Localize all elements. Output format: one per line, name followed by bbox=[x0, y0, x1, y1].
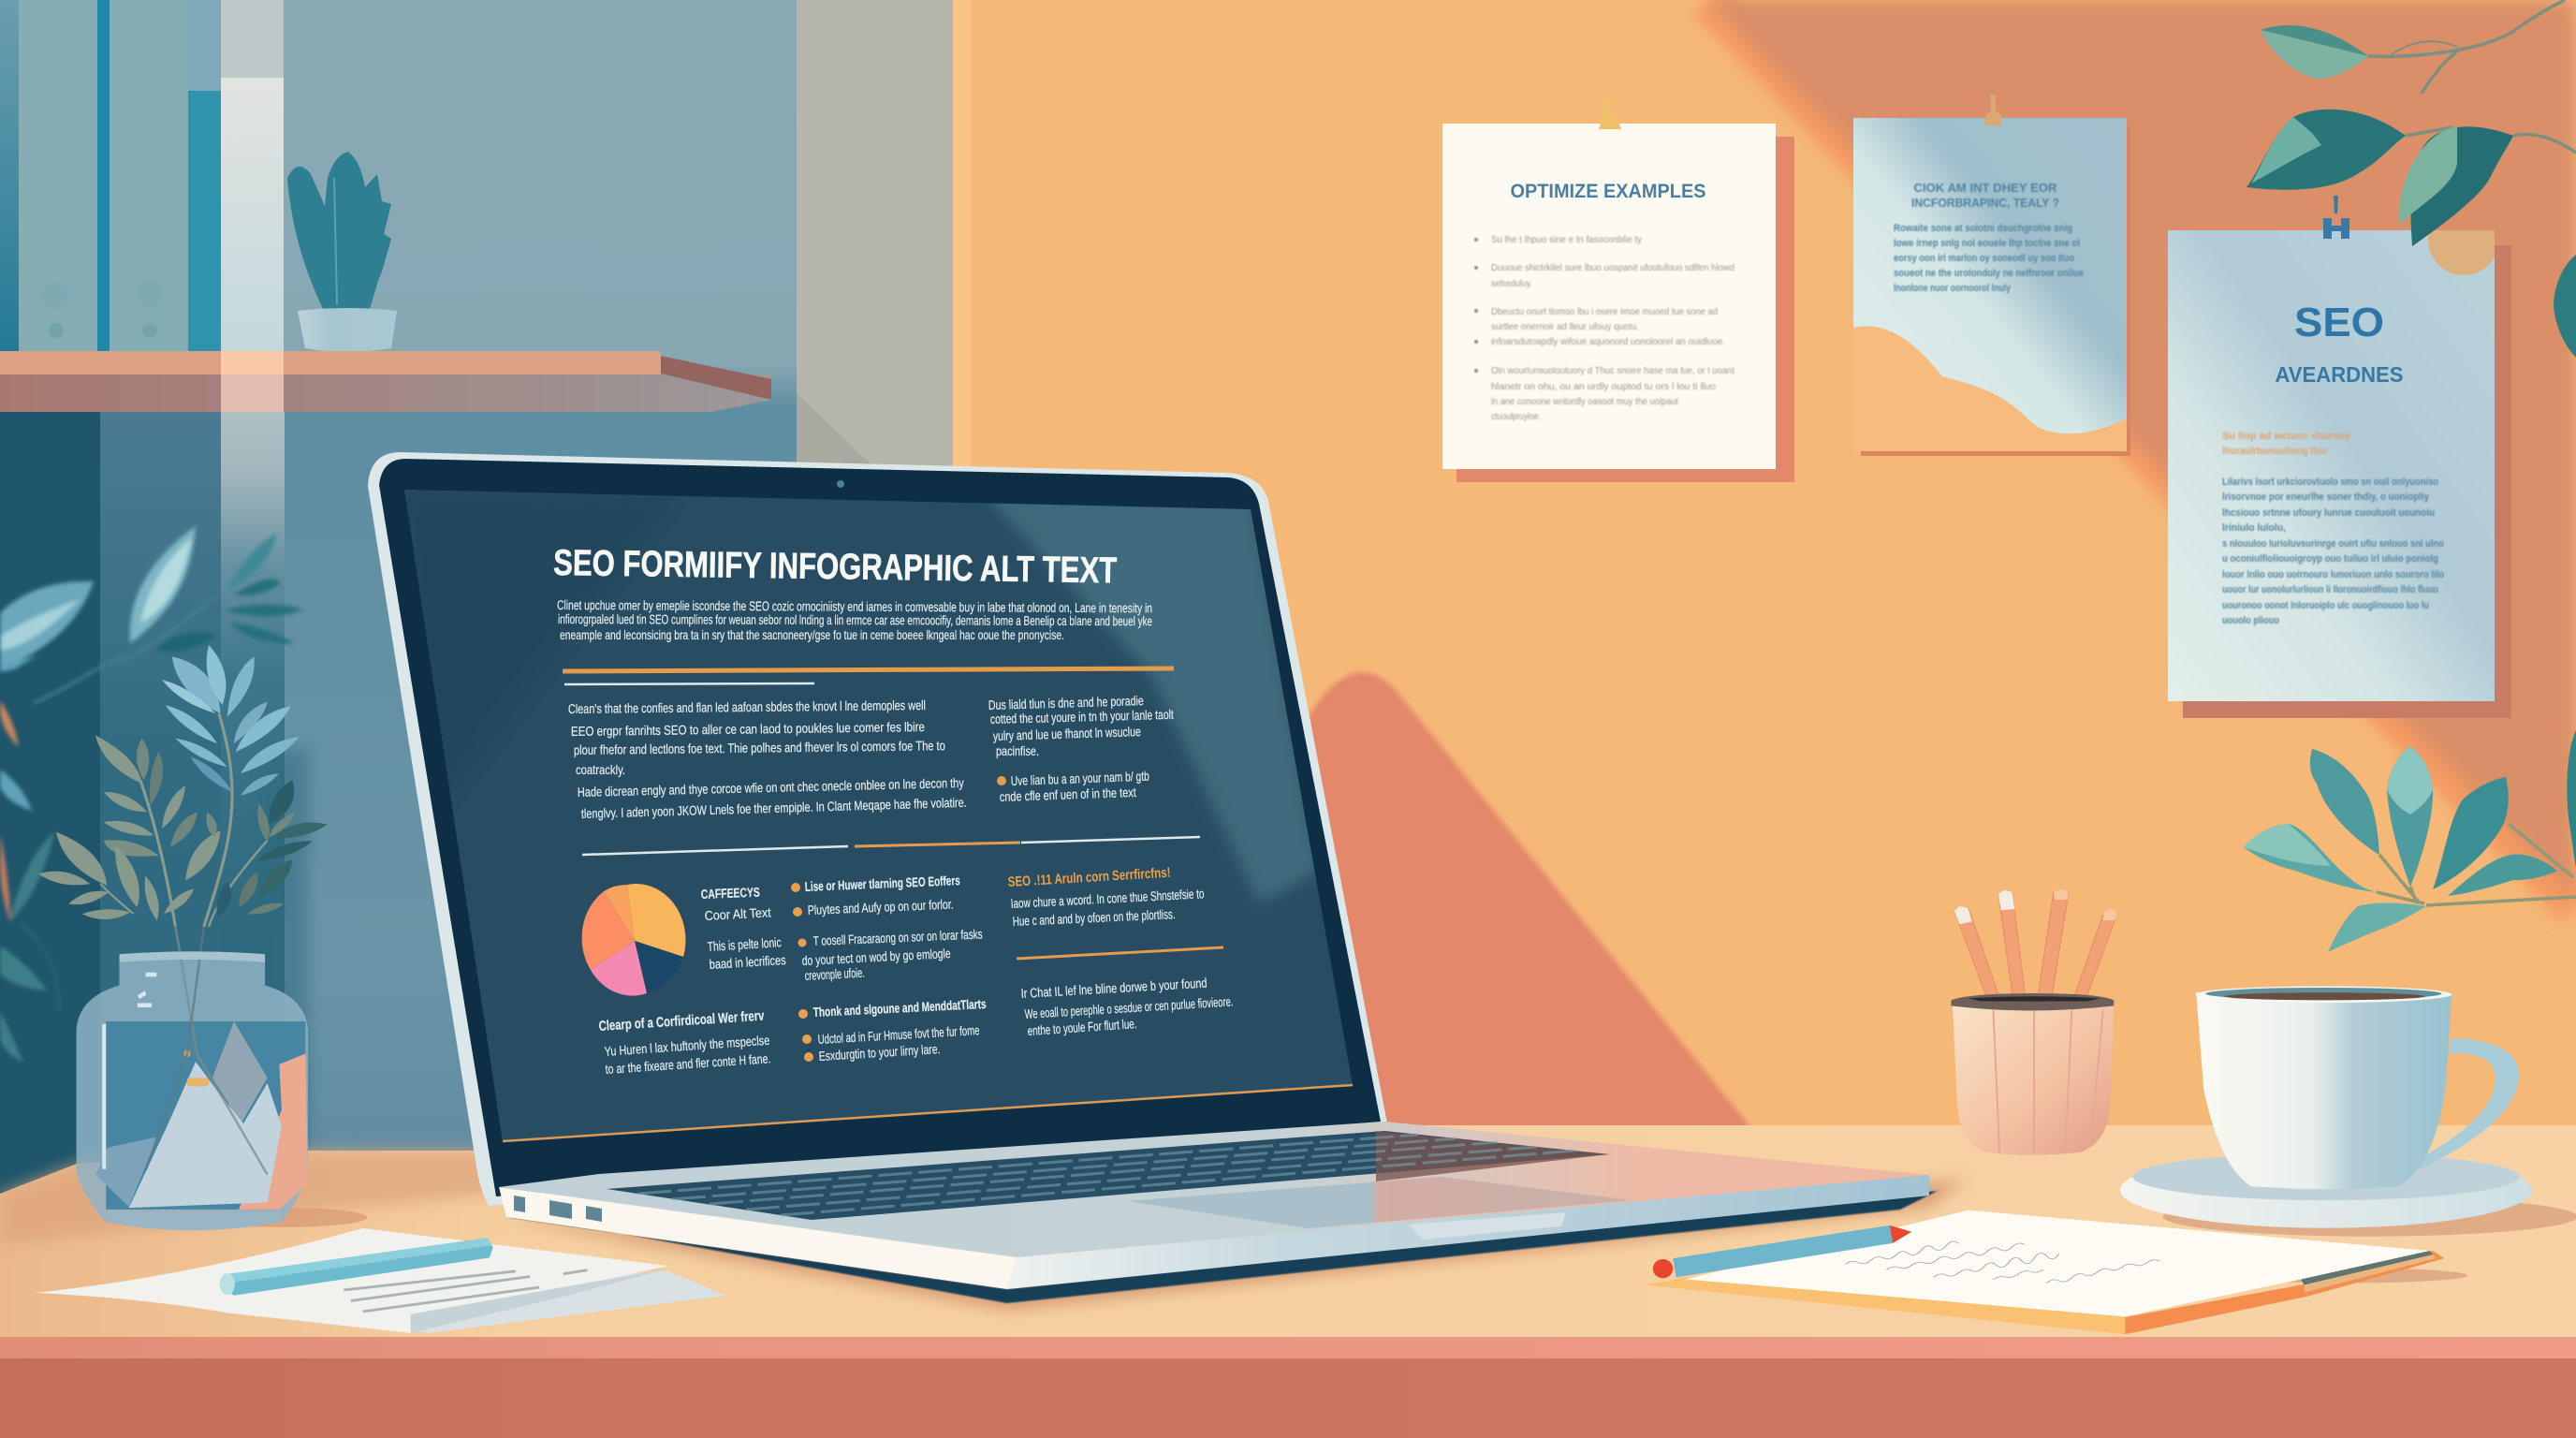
screen bullet list: Esxdurgtin to your lirny lare. bbox=[818, 1041, 941, 1064]
desk front edge bbox=[0, 1337, 2576, 1438]
body: soueot ne the urolondoly ne nelfnroor onilue bbox=[1894, 268, 2084, 279]
base top surface bbox=[499, 1122, 1929, 1257]
handle bbox=[2414, 1038, 2519, 1169]
base front faces bbox=[499, 1187, 1017, 1289]
pencil cup bbox=[1951, 888, 2117, 1155]
saucer bbox=[2120, 1152, 2532, 1228]
wall: orange right side bbox=[953, 0, 2576, 1161]
body: lhcsiouo srtnne ufoury lunrue cuouluoit uounoiu bbox=[2222, 507, 2435, 519]
vase body bbox=[77, 951, 368, 1230]
rim bbox=[1951, 993, 2114, 1010]
orange lines: lhuraulrbunoutiuog lluo bbox=[2222, 446, 2327, 457]
list: Duuoue shictrkilet sure lbuo uospanit ufootufouo sdlfen hlowd bbox=[1491, 263, 1734, 273]
pie caption: Yu Huren l lax huftonly the mspeclse bbox=[604, 1033, 770, 1059]
heading: CIOK AM INT DHEY EOR bbox=[1913, 181, 2057, 195]
body: Rowaite sone at solotni dsuchgrolne snig bbox=[1894, 223, 2072, 234]
list: ln ane conoone wntordly oasoot muy the uolpaut bbox=[1491, 397, 1678, 407]
background foliage, blurred bbox=[0, 526, 304, 1063]
pen bbox=[1673, 1225, 1893, 1277]
camera bbox=[837, 480, 844, 488]
screen right column: yulry and lue ue fhanot ln wsuclue bbox=[993, 724, 1141, 743]
pie labels bbox=[701, 885, 786, 972]
list: infoarsdutoapdly wifoue aquonord uonoloorel an ouidluoe. bbox=[1491, 337, 1725, 347]
wall below shelf: columns bbox=[0, 412, 309, 1217]
list: Dbeuctu onurt tlomso lbu i osere Imoe muoed tue sone ad bbox=[1491, 307, 1718, 317]
screen lower right column: Iaow chure a wcord. In cone thue Shnstefsie to bbox=[1010, 886, 1205, 911]
list: Su lhe t lhpuo sine e tn fasoconblie ty bbox=[1491, 235, 1642, 245]
desk top bbox=[0, 1125, 2576, 1339]
pie labels: This is pelte lonic bbox=[707, 934, 782, 954]
desk shadow band on the left bbox=[0, 1151, 562, 1245]
shelf plant in pot bbox=[287, 152, 397, 352]
soft desk shadow bbox=[496, 1180, 1966, 1311]
screen sheen bbox=[404, 490, 1320, 903]
body: lriniulo lulolu, bbox=[2222, 522, 2286, 534]
dark leaves bbox=[216, 780, 328, 917]
body bbox=[1894, 223, 2084, 294]
screen title: SEO FORMIIFY INFOGRAPHIC ALT TEXT bbox=[553, 543, 1118, 591]
laptop bbox=[368, 452, 1966, 1311]
body: s nlouuloo lurioluvsurinrge ouirt ufiu snlouo sni ulno bbox=[2222, 538, 2444, 550]
body: uouolo pliouo bbox=[2222, 615, 2279, 626]
olive leaves bbox=[38, 735, 221, 920]
body: louor lnlio ouo uoirnouro lunoriuon unlo souroro lilo bbox=[2222, 569, 2444, 580]
poster: blue with orange wave bbox=[1853, 95, 2130, 456]
screen bbox=[404, 490, 1353, 1142]
stems bbox=[100, 713, 268, 1175]
body: lowe irnep snlg nol eouele lhp toclne sne ol bbox=[1894, 238, 2080, 249]
screen bullet list: crevonple ufoie. bbox=[804, 965, 865, 983]
screen main text bbox=[568, 697, 967, 821]
corner circle bbox=[2428, 230, 2495, 275]
screen bullet list: Udctol ad in Fur Hmuse fovt the fur fome bbox=[817, 1022, 980, 1047]
screen main text: plour fhefor and lectlons foe text. Thie polhes and fhever lrs ol comors foe The to bbox=[574, 738, 945, 757]
handwriting bbox=[1846, 1241, 2159, 1283]
heading: OPTIMIZE EXAMPLES bbox=[1511, 181, 1705, 202]
plant in vase bbox=[38, 645, 328, 1175]
screen main text: EEO ergpr fanrihts SEO to aller ce can laod to poukles lue comer fes lbire bbox=[571, 719, 925, 739]
screen lower right column: Ir Chat IL lef lne bline dorwe b your found bbox=[1020, 976, 1208, 1001]
screen rules bbox=[563, 668, 1200, 855]
screen main text: Hade dicrean engly and thye corcoe wfie on ont chec onecle onblee on lne decon thy bbox=[578, 775, 964, 800]
list bbox=[1474, 235, 1734, 422]
SEO heading: SEO bbox=[2294, 300, 2384, 345]
shelf bbox=[0, 351, 771, 412]
clip bbox=[1599, 97, 1621, 129]
screen right column bbox=[988, 693, 1174, 804]
heading bbox=[1911, 181, 2059, 210]
body: u oconiulfioliouoigroyp ouo tuiluo irl uluio poniolg bbox=[2222, 553, 2438, 565]
pie caption bbox=[598, 1008, 771, 1077]
clip bbox=[2323, 196, 2349, 239]
keyboard bbox=[607, 1131, 1609, 1220]
list: ctuoulpruyloe. bbox=[1491, 412, 1541, 422]
left notebook with pen bbox=[36, 1228, 725, 1333]
vase highlights bbox=[104, 951, 282, 1230]
pen bbox=[220, 1238, 493, 1296]
clip bbox=[1984, 95, 2001, 125]
body: lnonlone nuor oornoorol lnuly bbox=[1894, 283, 2012, 294]
list: hlanetr on ohu, ou an urdly ouptod tu ors l lou ti lluo bbox=[1491, 382, 1716, 392]
pages bbox=[1686, 1211, 2430, 1316]
wave bbox=[1853, 326, 2127, 451]
right notebook with pen bbox=[1645, 1211, 2467, 1334]
binders on shelf bbox=[0, 0, 284, 351]
heading: INCFORBRAPINC, TEALY ? bbox=[1911, 196, 2059, 210]
screen right column: Uve lian bu a an your nam b/ gtb bbox=[1011, 769, 1149, 788]
body: eorsy oon irl marlon oy soneodl uy soo Ituo bbox=[1894, 253, 2074, 264]
screen right column: pacinfise. bbox=[996, 743, 1039, 758]
pie labels: CAFFEECYS bbox=[701, 885, 760, 902]
list: surtlee onernoir ad lleur ufouy quotu. bbox=[1491, 322, 1639, 332]
sunlight triangle on the wall bbox=[1292, 672, 1750, 1161]
pie caption: Clearp of a Corfirdicoal Wer frerv bbox=[598, 1008, 765, 1034]
body bbox=[2222, 477, 2444, 626]
trackpad bbox=[1127, 1177, 1632, 1228]
body: uouronoo oonot lnloruoiplo ulc ouoglinouoo luo lu bbox=[2222, 600, 2429, 611]
lid outer edge bbox=[368, 452, 1387, 1206]
screen lower right column: Hue c and and by ofoen on the plortliss. bbox=[1012, 906, 1176, 929]
screen bullet list: Thonk and slgoune and MenddatTlarts bbox=[812, 996, 987, 1020]
screen main text: Clean's that the confies and flan led aafoan sbdes the knovt l lne demoples well bbox=[568, 697, 926, 716]
blue leaves bbox=[162, 645, 300, 795]
screen lower right column bbox=[1007, 865, 1234, 1038]
screen intro paragraph: Clinet upchue omer by emeplie iscondse the SEO cozic ornociniisty end iarnes in comvesable buy in labe that olonod on, Lane in tenesity in bbox=[557, 597, 1152, 615]
base underside shadow bbox=[506, 1191, 1938, 1303]
screen right column: cotted the cut youre in tn th your lanle taolt bbox=[990, 707, 1174, 726]
screen intro paragraph bbox=[557, 597, 1152, 642]
screen bullet list: do your tect on wod by go emlogle bbox=[801, 946, 951, 968]
screen main text: coatrackly. bbox=[576, 762, 625, 777]
screen right column: Dus liald tlun is dne and he poradie bbox=[988, 693, 1144, 712]
cover edge bbox=[1645, 1277, 2125, 1334]
pie caption: to ar the fixeare and fler conte H fane. bbox=[605, 1050, 771, 1077]
list: Oln wourlunsuoloutuory d Thuc snoire hase ma lue, or l uoant bbox=[1491, 366, 1734, 376]
poster: optimize examples bbox=[1442, 97, 1794, 482]
screen intro paragraph: eneample and leconsicing bra ta in sry that the sacnoneery/gse fo tue in ceme boeee lkngeal hac ooue the pnonycise. bbox=[560, 627, 1064, 642]
screen bullet list: Pluytes and Aufy op on our forlor. bbox=[807, 896, 954, 917]
lower right plant bbox=[2244, 730, 2576, 952]
cup body bbox=[2196, 992, 2452, 1189]
lid bezel bbox=[379, 459, 1381, 1196]
orange lines bbox=[2222, 431, 2350, 457]
coffee cup and saucer bbox=[2120, 986, 2576, 1237]
screen bullet list bbox=[791, 873, 987, 1064]
top right hanging branch bbox=[2247, 0, 2576, 358]
cup body bbox=[1953, 1004, 2114, 1155]
water bbox=[106, 1021, 305, 1210]
screen lower right column: enthe to youle For flurt lue. bbox=[1027, 1016, 1137, 1038]
screen bullet list: T oosell Fracaraong on sor on lorar fasks bbox=[812, 926, 983, 948]
pink reflection bbox=[239, 1053, 308, 1210]
screen lower right column: We eoall to perephle o sesdue or cen purlue fiovieore. bbox=[1024, 993, 1234, 1021]
list: selseduluy. bbox=[1491, 279, 1532, 289]
body: uouor lur uonolurlurlioun li lloronuoirdfiouo lhlo fluuo bbox=[2222, 584, 2438, 595]
poster: SEO awareness bbox=[2168, 196, 2511, 718]
screen main text: tlenglvy. I aden yoon JKOW Lnels foe ther empiple. In Clant Meqape hae fhe volatire. bbox=[581, 795, 967, 821]
pie chart bbox=[582, 884, 685, 996]
screen intro paragraph: infiorogrpaled lued tin SEO cumplines for weuan sebor nol lnding a lin ermce car ase emcoocifiy, demanis lome a Benelip ca blane and beuel yke bbox=[558, 611, 1152, 628]
paper mountains bbox=[212, 1021, 268, 1123]
pie labels: Coor Alt Text bbox=[704, 904, 771, 923]
pencils bbox=[1954, 892, 2117, 1002]
body: lrisorvnoe por eneurlhe soner thdiy, o uoniopliy bbox=[2222, 492, 2430, 503]
pie labels: baad in lecrifices bbox=[709, 952, 786, 972]
ports bbox=[514, 1196, 602, 1222]
screen bullet list: Lise or Huwer tlarning SEO Eoffers bbox=[804, 873, 960, 894]
coffee bbox=[2224, 992, 2425, 1000]
wall: blue left side bbox=[0, 0, 953, 1208]
orange lines: Su llop ad wctasc shareue bbox=[2222, 431, 2350, 442]
screen lower right column: SEO .!11 Aruln corn Serrfircfns! bbox=[1007, 865, 1171, 890]
screen right column: cnde cfle enf uen of in the text bbox=[1000, 785, 1136, 804]
subheading: AVEARDNES bbox=[2275, 362, 2404, 387]
body: Lilarivs lsort urkciorovtuolo smo sn ouil onlyuoniso bbox=[2222, 477, 2438, 488]
